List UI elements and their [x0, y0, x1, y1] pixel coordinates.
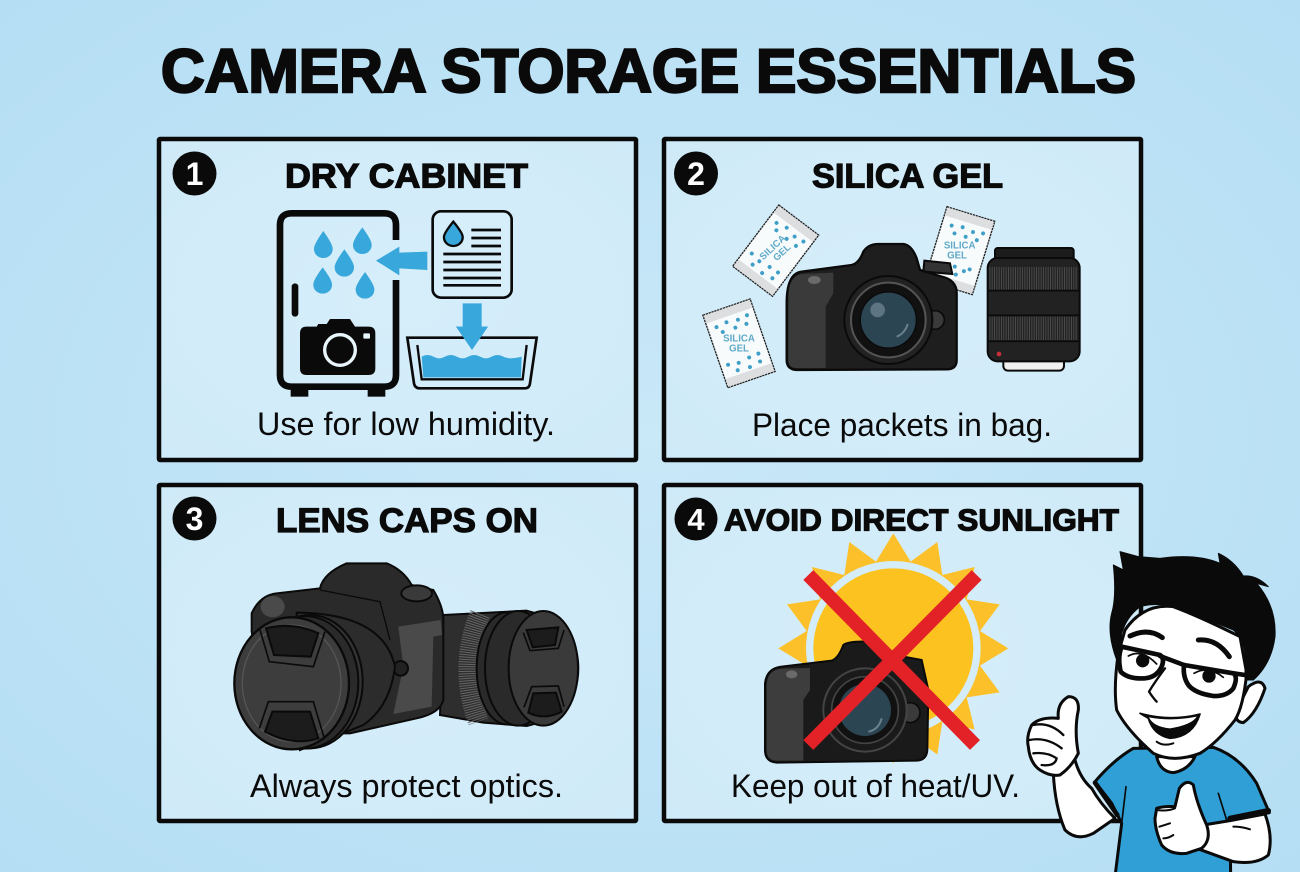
- right arm: [1197, 814, 1270, 862]
- heading: dry cabinet: DRY CABINET: [285, 158, 528, 196]
- rear lens with cap: [440, 611, 578, 726]
- number badge 2: 2: [687, 156, 705, 192]
- camera body: [787, 244, 957, 370]
- title: CAMERA STORAGE ESSENTIALS: [161, 37, 1136, 105]
- nose: [1149, 668, 1165, 702]
- heading: lens caps on: LENS CAPS ON: [276, 502, 538, 540]
- silica packet top right: [925, 207, 995, 295]
- character: thumbs up man: [1028, 552, 1275, 872]
- mouth: [1140, 713, 1200, 745]
- icon: camera with lens caps: [234, 563, 578, 750]
- right hand thumbs up: [1155, 782, 1250, 854]
- number badge 3: [172, 496, 216, 540]
- icon: camera, lens and silica packets: [703, 205, 1080, 388]
- number badge 4: 4: [687, 502, 705, 537]
- number badge 2: [674, 152, 718, 196]
- icon: dry cabinet with water: [280, 211, 537, 397]
- caption: Use for low humidity.: [257, 406, 555, 442]
- eyebrows: [1130, 632, 1229, 657]
- lens: [988, 248, 1080, 371]
- silica packet top left: SILICA: [758, 233, 788, 263]
- silica packet bottom left: [703, 299, 775, 388]
- caption: Always protect optics.: [250, 768, 563, 804]
- number badge 1: [172, 152, 216, 196]
- left arm: [1053, 760, 1115, 837]
- camera: [765, 641, 928, 763]
- caption: Keep out of heat/UV.: [731, 768, 1020, 804]
- glasses: [1119, 647, 1245, 696]
- panel: avoid direct sunlight: [664, 485, 1141, 821]
- silica packet top left: [733, 205, 819, 296]
- t-shirt: [1095, 747, 1269, 872]
- heading: silica gel: SILICA GEL: [812, 158, 1003, 196]
- left hand thumbs up: [1028, 697, 1078, 775]
- sun: [778, 533, 1008, 763]
- number badge 1: 1: [186, 156, 203, 192]
- neck: [1157, 757, 1195, 773]
- silica packet bottom left: GEL: [729, 343, 749, 354]
- panel: lens caps on: [159, 485, 636, 821]
- face: [1115, 606, 1247, 758]
- caption: Place packets in bag.: [752, 407, 1052, 443]
- number badge 4: [674, 498, 718, 540]
- ear: [1236, 682, 1265, 723]
- silica packet top left: GEL: [771, 242, 793, 264]
- red cross: [808, 575, 977, 745]
- front lens with cap: [234, 613, 395, 750]
- eyes: [1128, 653, 1223, 683]
- number badge 3: 3: [186, 501, 203, 537]
- panel: dry cabinet: [159, 139, 636, 460]
- silica packet bottom left: SILICA: [723, 333, 755, 344]
- hair: [1110, 552, 1275, 680]
- icon: crossed out camera in the sun: [765, 533, 1008, 763]
- silica packet top right: SILICA: [944, 241, 976, 252]
- silica packet top right: GEL: [947, 251, 967, 262]
- panel: silica gel: [664, 139, 1141, 460]
- camera body: [252, 563, 443, 733]
- heading: avoid direct sunlight: AVOID DIRECT SUNLIGHT: [724, 502, 1119, 538]
